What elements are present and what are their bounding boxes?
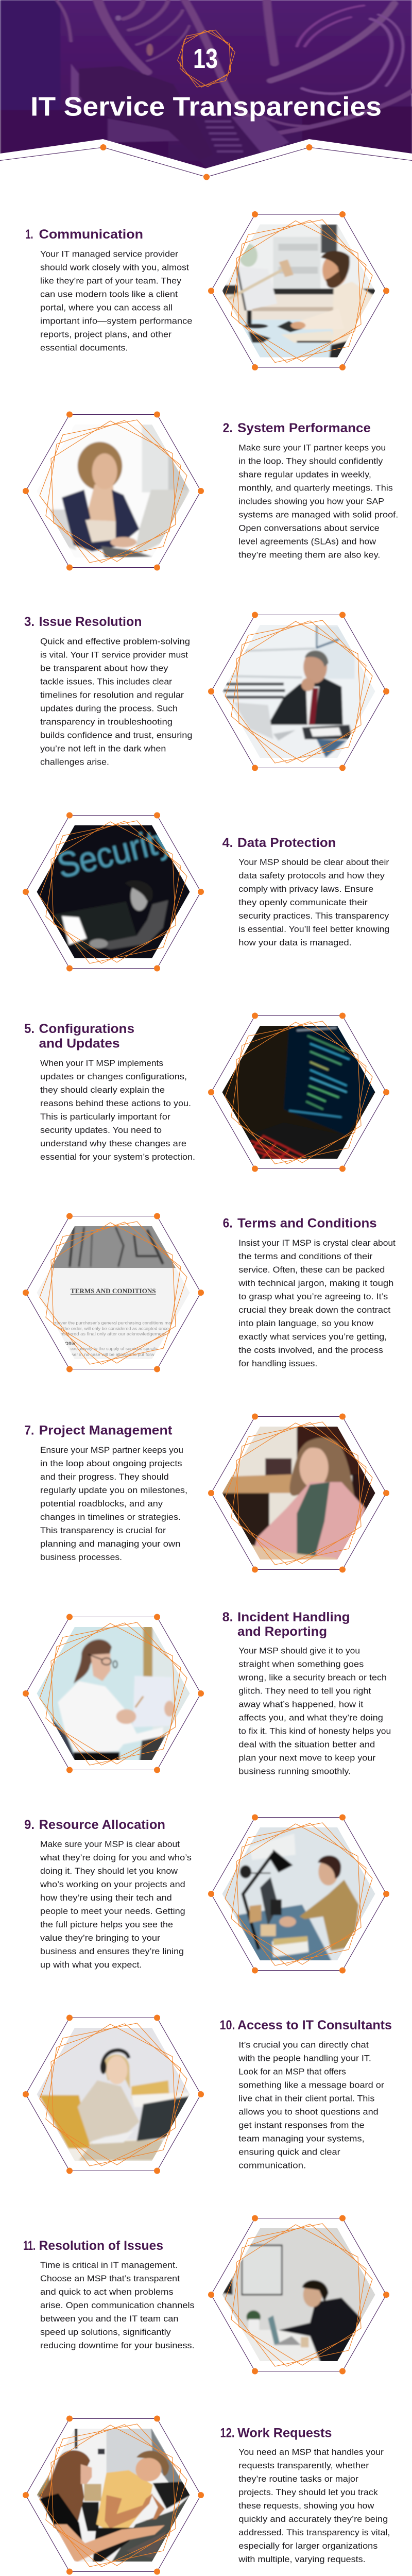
header banner [0, 0, 412, 180]
body text: can use modern tools like a client [40, 290, 178, 299]
body text: builds confidence and trust, ensuring [40, 731, 193, 740]
body text: value they’re bringing to your [40, 1934, 161, 1943]
body text: business running smoothly. [238, 1767, 351, 1776]
orange overlay [225, 2224, 372, 2366]
photo: laptop code [208, 1013, 389, 1172]
hexagon frame [23, 2415, 204, 2575]
body text: ensuring quick and clear [238, 2147, 340, 2157]
heading [24, 1022, 134, 1051]
body text: exactly what services you’re getting, [238, 1332, 387, 1342]
body text: in the loop. They should confidently [238, 456, 383, 466]
heading: 7. [24, 1423, 34, 1437]
hexagon frame [23, 2014, 204, 2174]
photo: security screen: Security [53, 819, 177, 886]
body text [238, 2448, 390, 2564]
body text: This is particularly important for [40, 1112, 171, 1122]
heading: 12. [220, 2426, 235, 2440]
body text: how your data is managed. [238, 938, 352, 947]
heading: 9. [24, 1818, 35, 1832]
body text: updates or changes configurations, [40, 1072, 187, 1081]
heading: 11. [23, 2239, 36, 2253]
hexagon frame [208, 612, 389, 771]
hexagon frame [208, 1815, 389, 1973]
heading: 4. [222, 836, 233, 850]
photo: terms document: atever the purchaser's general purchasing conditions may [54, 1321, 174, 1326]
photo: woman with laptop [23, 411, 204, 571]
body text: team managing your systems, [238, 2134, 365, 2143]
body text: up with what you expect. [40, 1960, 142, 1970]
heading: Work Requests [237, 2426, 332, 2440]
hexagon frame [23, 1213, 204, 1372]
body text: regularly update you on milestones, [40, 1486, 187, 1495]
body text [40, 1446, 187, 1562]
body text [238, 2040, 384, 2170]
body text: deal with the situation better and [238, 1740, 375, 1750]
body text: service. Often, these can be packed [238, 1265, 385, 1275]
photo: two women at table [23, 2415, 204, 2575]
body text: with the people handling your IT. [238, 2054, 371, 2063]
panel: 12 Work Requests [23, 2415, 390, 2575]
panel: 4 Data Protection [23, 812, 389, 972]
body text: tackle issues. This includes clear [40, 677, 173, 686]
orange overlay [225, 1021, 372, 1164]
heading: and Updates [39, 1037, 120, 1051]
body text: challenges arise. [40, 757, 109, 767]
body text: share regular updates in weekly, [238, 470, 371, 479]
heading: 6. [223, 1216, 233, 1230]
big number: 13 [193, 43, 218, 74]
hexagon frame [208, 211, 389, 370]
body text: is vital. Your IT service provider must [40, 650, 188, 659]
body text: You need an MSP that handles your [238, 2448, 384, 2457]
body text: especially for larger organizations [238, 2541, 377, 2551]
panel: 7 Project Management [24, 1414, 389, 1572]
panel: 1 Communication [26, 211, 389, 370]
photo: man in hoodie at laptop [208, 2215, 389, 2374]
body text: reports, project plans, and other [40, 330, 172, 339]
panel: 10 Access to IT Consultants [23, 2014, 392, 2174]
photo: terms document: ser in no case will be allowed to put forw [72, 1352, 154, 1357]
body text: addressed. This transparency is vital, [238, 2528, 390, 2537]
panel: 11 Resolution of Issues [23, 2215, 389, 2374]
hexagon frame [208, 1013, 389, 1172]
body text: the costs involved, and the process [238, 1346, 383, 1355]
body text: essential for your system’s protection. [40, 1153, 195, 1162]
body text: Choose an MSP that’s transparent [40, 2274, 180, 2283]
body text: these requests, showing you how [238, 2501, 374, 2511]
body text: systems are managed with solid proof. [238, 510, 398, 519]
heading: Data Protection [237, 836, 336, 850]
body text [40, 1059, 195, 1162]
body text: When your IT MSP implements [40, 1059, 163, 1068]
body text: they openly communicate their [238, 898, 368, 907]
photo: terms document: TERMS AND CONDITIONS [71, 1287, 156, 1295]
body text: crucial they break down the contract [238, 1306, 391, 1315]
body text: and their progress. They should [40, 1472, 169, 1482]
body text: Look for an MSP that offers [238, 2067, 346, 2076]
photo: man in suit at laptop [208, 612, 389, 771]
orange overlay [40, 420, 187, 563]
body text: Your IT managed service provider [40, 249, 179, 259]
body text: speed up solutions, significantly [40, 2328, 171, 2337]
body text: allows you to shoot questions and [238, 2107, 379, 2116]
heading: 3. [24, 615, 35, 629]
body text [40, 1840, 192, 1970]
photo: terms document: in the order, will only be considered as accepted once [58, 1326, 169, 1331]
panel: 5 Configurations and Updates [24, 1013, 389, 1172]
body text: level agreements (SLAs) and how [238, 537, 376, 546]
orange overlay [225, 219, 372, 363]
heading: Terms and Conditions [237, 1216, 377, 1230]
body text: people to meet your needs. Getting [40, 1907, 185, 1916]
panel: 8 Incident Handling and Reporting [23, 1610, 391, 1776]
heading: Communication [39, 227, 143, 242]
body text: communication. [238, 2161, 306, 2170]
body text: projects. They should let you track [238, 2488, 379, 2497]
body text: something like a message board or [238, 2080, 384, 2090]
body text: be transparent about how they [40, 664, 168, 673]
orange overlay [225, 1823, 372, 1965]
orange overlay [40, 2424, 187, 2567]
hexagon frame [23, 812, 204, 972]
hexagon frame [208, 1414, 389, 1572]
body text: changes in timelines or strategies. [40, 1513, 181, 1522]
title: IT Service Transparencies [30, 92, 382, 122]
body text: the terms and conditions of their [238, 1252, 373, 1261]
body text: business processes. [40, 1553, 122, 1562]
photo: woman holding paper [23, 1614, 204, 1773]
heading: 5. [24, 1022, 35, 1036]
body text: potential roadblocks, and any [40, 1499, 163, 1509]
body text: arise. Open communication channels [40, 2301, 195, 2310]
body text: Quick and effective problem-solving [40, 637, 190, 646]
body text: Make sure your IT partner keeps you [238, 443, 386, 452]
heading: Resolution of Issues [39, 2239, 163, 2253]
body text: and quick to act when problems [40, 2287, 174, 2297]
photo: terms document: nsidered as final only after our acknowledgement [60, 1332, 166, 1336]
body text: the full picture helps you see the [40, 1920, 173, 1929]
body text: planning and managing your own [40, 1539, 180, 1549]
body text: Ensure your MSP partner keeps you [40, 1446, 183, 1455]
body text [238, 1647, 391, 1776]
body text: This transparency is crucial for [40, 1526, 166, 1535]
body text: Time is critical in IT management. [40, 2261, 178, 2270]
photo: security screen [23, 812, 204, 972]
body text: how they’re using their tech and [40, 1893, 172, 1903]
body text: It’s crucial you can directly chat [238, 2040, 369, 2049]
body text: security updates. You need to [40, 1126, 162, 1135]
body text: with multiple, varying requests. [238, 2555, 366, 2564]
heading: 8. [222, 1610, 233, 1624]
heading: Access to IT Consultants [237, 2018, 392, 2032]
body text: portal, where you can access all [40, 303, 173, 312]
hexagon frame [208, 2215, 389, 2374]
hero photo background [0, 0, 412, 172]
body text [238, 1239, 396, 1368]
heading: and Reporting [237, 1624, 327, 1639]
photo: woman in pink blazer [208, 1414, 389, 1572]
body text: transparency in troubleshooting [40, 717, 173, 726]
body text: in the loop about ongoing projects [40, 1459, 182, 1468]
body text: to fix it. This kind of honesty helps you [238, 1727, 391, 1736]
body text: who’s working on your projects and [40, 1880, 185, 1889]
body text: affects you, and what they’re doing [238, 1714, 383, 1723]
heading [222, 1610, 350, 1639]
hexagon frame [23, 411, 204, 571]
body text: important info—system performance [40, 316, 193, 326]
body text: Your MSP should give it to you [238, 1647, 360, 1656]
body text: reasons behind these actions to you. [40, 1099, 191, 1108]
body text: Make sure your MSP is clear about [40, 1840, 180, 1849]
orange overlay [40, 1222, 187, 1364]
photo: terms document [23, 1213, 204, 1372]
heading: Resource Allocation [39, 1818, 165, 1832]
body text: includes showing you how your SAP [238, 497, 384, 506]
body text: they’re routine tasks or major [238, 2475, 358, 2484]
photo: terms document: exclusively to the supply of services specific [71, 1347, 159, 1351]
orange overlay [40, 1622, 187, 1765]
body text: Your MSP should be clear about their [238, 858, 389, 867]
body text: they should clearly explain the [40, 1086, 165, 1095]
body text: Open conversations about service [238, 523, 380, 533]
heading: Issue Resolution [39, 615, 142, 629]
body text: plan your next move to keep your [238, 1754, 376, 1763]
body text: understand why these changes are [40, 1139, 186, 1148]
body text [238, 443, 398, 560]
body text: monthly, and quarterly meetings. This [238, 483, 393, 493]
body text: Insist your IT MSP is crystal clear about [238, 1239, 396, 1248]
body text: away what’s happened, how it [238, 1700, 364, 1709]
body text: into plain language, so you know [238, 1319, 373, 1328]
body text: glitch. They need to tell you right [238, 1687, 371, 1696]
panel: 9 Resource Allocation [24, 1815, 389, 1973]
body text: live chat in their client portal. This [238, 2094, 374, 2103]
body text: what they’re doing for you and who’s [40, 1853, 192, 1862]
body text: security practices. This transparency [238, 911, 389, 921]
photo: woman with headphones [23, 2014, 204, 2174]
heading: Project Management [39, 1423, 173, 1437]
body text: data safety protocols and how they [238, 871, 385, 880]
emblem: small hexagon [178, 30, 235, 87]
photo: terms document: Offer [65, 1341, 76, 1346]
body text: essential documents. [40, 343, 128, 352]
hexagon frame [23, 1614, 204, 1773]
body text: for handling issues. [238, 1359, 317, 1368]
panel: 3 Issue Resolution [24, 612, 389, 771]
body text: wrong, like a security breach or tech [238, 1673, 387, 1683]
body text: quickly and accurately they’re being [238, 2515, 388, 2524]
decorative chevron line [0, 147, 412, 177]
heading: 2. [223, 421, 233, 435]
body text: requests transparently, whether [238, 2461, 369, 2470]
body text [40, 2261, 195, 2350]
body text [40, 637, 193, 767]
body text: should work closely with you, almost [40, 263, 189, 272]
body text: timelines for resolution and regular [40, 690, 184, 700]
orange overlay [225, 1422, 372, 1565]
heading: Configurations [39, 1022, 134, 1036]
body text: between you and the IT team can [40, 2314, 178, 2324]
body text: doing it. They should let you know [40, 1867, 178, 1876]
body text: get instant responses from the [238, 2121, 365, 2130]
photo: man at desk [208, 211, 389, 370]
body text: business and ensures they’re lining [40, 1947, 184, 1956]
body text: to grasp what you’re agreeing to. It’s [238, 1292, 388, 1301]
body text [238, 858, 389, 947]
heading: 10. [219, 2018, 235, 2032]
body text: like they’re part of your team. They [40, 276, 182, 285]
orange overlay [225, 620, 372, 763]
orange overlay [40, 821, 187, 963]
heading: 1. [26, 227, 33, 242]
body text [40, 249, 193, 352]
panel: 2 System Performance [23, 411, 398, 571]
body text: updates during the process. Such [40, 704, 178, 713]
body text: they’re meeting them are also key. [238, 550, 380, 560]
heading: System Performance [237, 421, 371, 435]
body text: reducing downtime for your business. [40, 2341, 195, 2350]
body text: comply with privacy laws. Ensure [238, 885, 373, 894]
heading: Incident Handling [237, 1610, 350, 1624]
body text: straight when something goes [238, 1660, 364, 1669]
body text: is essential. You’ll feel better knowing [238, 925, 389, 934]
photo: man at desk with lamp [208, 1815, 389, 1973]
orange overlay [40, 2023, 187, 2166]
panel: 6 Terms and Conditions [23, 1213, 396, 1372]
chevron dots [100, 144, 312, 180]
body text: you’re not left in the dark when [40, 744, 166, 753]
body text: with technical jargon, making it tough [238, 1279, 393, 1288]
